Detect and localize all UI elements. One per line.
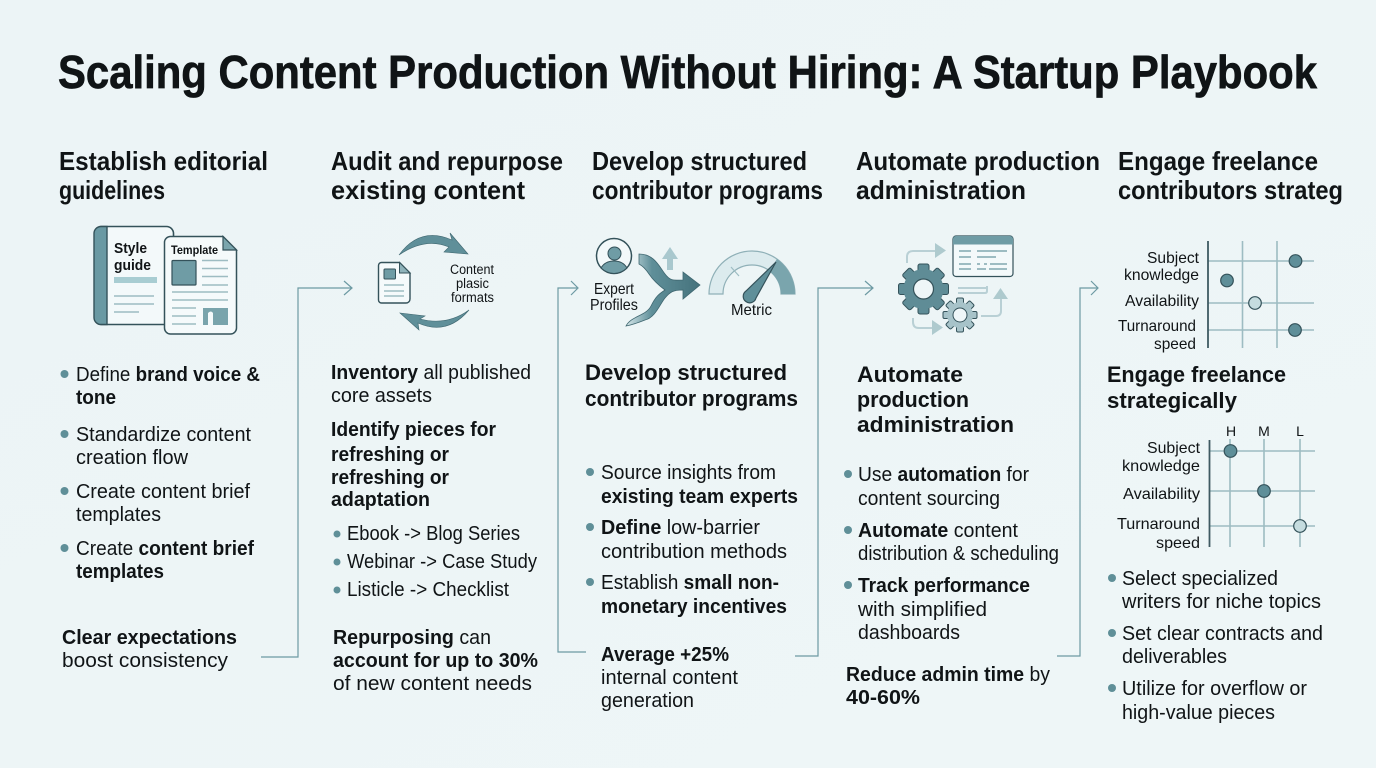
icon: repurpose cycle: formats — [451, 290, 494, 305]
text: identify pieces — [331, 419, 496, 511]
list: contributor actions — [586, 462, 798, 618]
heading: audit and repurpose existing content: existing content — [331, 175, 525, 205]
icon: repurpose cycle — [378, 233, 494, 330]
chart: skills matrix bottom: Subject — [1147, 440, 1201, 457]
chart: skills matrix bottom: speed — [1156, 535, 1200, 552]
subheading: automate production administration: administration — [857, 412, 1014, 437]
callout: clear expectations: Clear expectations — [62, 627, 237, 649]
panel: establish editorial guidelines — [59, 146, 268, 672]
callout: average content increase: internal content — [601, 667, 738, 689]
panel: audit and repurpose — [331, 146, 563, 695]
chart: skills matrix bottom: L — [1296, 423, 1304, 439]
heading: audit and repurpose existing content: Audit and repurpose — [331, 146, 563, 176]
list: contributor actions: Define low-barrier — [601, 517, 760, 539]
list: freelance actions: deliverables — [1122, 646, 1227, 668]
chart: skills matrix top — [1118, 241, 1314, 353]
text: inventory: core assets — [331, 385, 432, 407]
panel: automate administration — [844, 146, 1100, 709]
heading: establish editorial guidelines — [59, 146, 268, 205]
icon: large gear — [898, 264, 948, 314]
chart: skills matrix top: Availability — [1125, 293, 1199, 310]
icon: style guide and template documents: guide — [114, 257, 151, 274]
list: guideline actions: Create content brief — [76, 481, 250, 503]
icon: style guide and template documents: Style — [114, 240, 147, 257]
list: guideline actions: Create content brief — [76, 538, 254, 560]
heading: engage freelance contributors: contributors strateg — [1118, 175, 1343, 205]
list: automation actions: Use automation for — [858, 464, 1029, 486]
list: repurposing examples — [334, 523, 537, 601]
heading: engage freelance contributors: Engage freelance — [1118, 146, 1318, 176]
icon: repurpose cycle: plasic — [456, 276, 489, 291]
callout: clear expectations: boost consistency — [62, 650, 228, 672]
list: freelance actions: Select specialized — [1122, 568, 1278, 590]
callout: repurposing share: Repurposing can — [333, 627, 491, 649]
chart: skills matrix top: Turnaround — [1118, 318, 1196, 335]
heading: establish editorial guidelines: Establish editorial — [59, 146, 268, 176]
text: inventory — [331, 362, 531, 407]
arrow: step 1 to step 2 — [261, 281, 352, 657]
list: guideline actions: tone — [76, 387, 116, 409]
callout: clear expectations — [62, 627, 237, 672]
text: identify pieces: refreshing or — [331, 444, 449, 466]
callout: reduce admin time: Reduce admin time by — [846, 664, 1050, 686]
arrow: step 4 to step 5 — [1057, 281, 1098, 656]
list: contributor actions: monetary incentives — [601, 596, 787, 618]
text: identify pieces: refreshing or — [331, 467, 449, 489]
list: guideline actions: Define brand voice & — [76, 364, 260, 386]
chart: skills matrix bottom: Availability — [1123, 486, 1200, 503]
list: freelance actions — [1108, 568, 1323, 724]
heading: develop structured contributor programs — [592, 146, 823, 205]
subheading: develop structured contributor programs: Develop structured — [585, 360, 787, 385]
icon: style guide and template documents: Template — [171, 243, 218, 257]
subheading: automate production administration — [857, 362, 1014, 437]
list: repurposing examples: Ebook -> Blog Series — [347, 523, 520, 545]
list: automation actions: Track performance — [858, 575, 1030, 597]
chart: skills matrix bottom: H — [1226, 423, 1236, 439]
list: contributor actions: Source insights from — [601, 462, 776, 484]
callout: average content increase: Average +25% — [601, 644, 729, 666]
subheading: develop structured contributor programs: contributor programs — [585, 386, 798, 411]
icon: repurpose cycle: Content — [450, 262, 494, 277]
heading: automate production administration: Automate production — [856, 146, 1100, 176]
icon: expert profiles merge — [590, 238, 795, 326]
icon: expert profiles merge: Expert — [594, 281, 634, 298]
list: freelance actions: Set clear contracts and — [1122, 623, 1323, 645]
chart: skills matrix top: Subject — [1147, 250, 1200, 267]
list: guideline actions: templates — [76, 504, 161, 526]
chart: skills matrix top: speed — [1154, 336, 1196, 353]
icon: expert profiles merge: Metric — [731, 302, 772, 319]
list: automation actions: content sourcing — [858, 488, 1000, 510]
arrow: step 3 to step 4 — [795, 281, 873, 656]
callout: average content increase: generation — [601, 690, 694, 712]
list: guideline actions: creation flow — [76, 447, 189, 469]
heading: automate production administration: administration — [856, 175, 1026, 205]
heading: automate production administration — [856, 146, 1100, 205]
callout: repurposing share — [333, 627, 538, 695]
list: guideline actions: Standardize content — [76, 424, 251, 446]
chart: skills matrix bottom: Turnaround — [1117, 516, 1200, 533]
list: freelance actions: writers for niche topics — [1121, 591, 1321, 613]
list: guideline actions — [60, 364, 260, 583]
callout: average content increase — [601, 644, 738, 712]
callout: repurposing share: account for up to 30% — [333, 650, 538, 672]
list: automation actions: with simplified — [857, 599, 987, 621]
icon: expert profiles merge: Profiles — [590, 297, 638, 314]
text: inventory: Inventory all published — [331, 362, 531, 384]
subheading: engage freelance strategically: strategically — [1107, 388, 1238, 413]
list: freelance actions: Utilize for overflow or — [1122, 678, 1307, 700]
text: identify pieces: adaptation — [331, 489, 430, 511]
chart: skills matrix bottom: M — [1258, 423, 1270, 439]
callout: repurposing share: of new content needs — [333, 673, 532, 695]
list: repurposing examples: Webinar -> Case Study — [347, 551, 537, 573]
icon: gears and dashboard — [898, 236, 1013, 335]
callout: reduce admin time — [846, 664, 1050, 709]
icon: small gear — [943, 298, 977, 332]
heading: develop structured contributor programs: Develop structured — [592, 146, 807, 176]
heading: develop structured contributor programs: contributor programs — [592, 175, 823, 205]
chart: skills matrix top: knowledge — [1124, 267, 1199, 284]
subheading: automate production administration: production — [857, 387, 969, 412]
subheading: engage freelance strategically — [1107, 362, 1286, 413]
callout: reduce admin time: 40-60% — [846, 687, 920, 709]
list: automation actions: distribution & scheduling — [858, 543, 1059, 565]
heading: audit and repurpose existing content — [331, 146, 563, 205]
list: automation actions — [844, 464, 1059, 644]
subheading: develop structured contributor programs — [585, 360, 798, 411]
subheading: automate production administration: Automate — [857, 362, 963, 387]
list: contributor actions: Establish small non- — [601, 572, 779, 594]
list: automation actions: dashboards — [858, 622, 960, 644]
list: freelance actions: high-value pieces — [1122, 702, 1275, 724]
icon: style guide and template documents — [94, 226, 236, 334]
heading: establish editorial guidelines: guidelines — [59, 175, 165, 205]
list: automation actions: Automate content — [858, 520, 1018, 542]
text: identify pieces: Identify pieces for — [331, 419, 496, 441]
list: contributor actions: contribution methods — [601, 541, 787, 563]
heading: engage freelance contributors — [1118, 146, 1343, 205]
subheading: engage freelance strategically: Engage freelance — [1107, 362, 1286, 387]
panel: engage freelance — [1107, 146, 1343, 724]
list: guideline actions: templates — [76, 561, 164, 583]
panel: contributor programs — [585, 146, 823, 712]
list: contributor actions: existing team experts — [601, 486, 798, 508]
chart: skills matrix bottom — [1117, 423, 1315, 552]
arrow: step 2 to step 3 — [558, 281, 586, 652]
chart: skills matrix bottom: knowledge — [1122, 458, 1200, 475]
list: repurposing examples: Listicle -> Checklist — [347, 579, 509, 601]
